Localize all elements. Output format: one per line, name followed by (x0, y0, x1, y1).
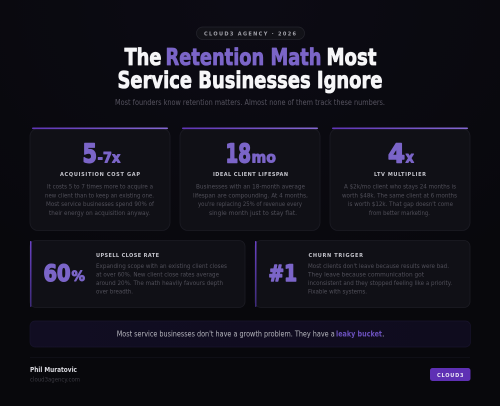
footer author: cloud3agency.com (30, 376, 80, 384)
callout (30, 321, 470, 347)
stat: 18mo: 18 (226, 140, 251, 170)
title: Most (326, 43, 376, 71)
header badge: CLOUD3 AGENCY · 2026 (204, 31, 297, 37)
body text: from better marketing. (369, 209, 430, 217)
label: ACQUISITION COST GAP (60, 172, 140, 178)
callout: Most service businesses don't have a growth problem. They have a (117, 330, 335, 338)
footer author (30, 365, 80, 384)
label: CHURN TRIGGER (308, 253, 363, 259)
panel: acquisition cost gap (30, 128, 170, 230)
body text: over breadth. (96, 288, 133, 296)
footer brand button (430, 368, 470, 381)
body text: Most clients don't leave because results were bad. (308, 262, 449, 270)
body text: worth $48k. The same client at 6 months (342, 191, 458, 199)
body text: They leave because communication got (307, 270, 424, 278)
callout: . (382, 330, 385, 338)
title: Retention Math (166, 43, 322, 71)
body text: their energy on acquisition anyway. (49, 209, 150, 217)
title: Service Businesses Ignore (118, 66, 382, 94)
body text: is worth $12k. That gap doesn't come (348, 200, 453, 208)
body text (96, 262, 228, 296)
label: LTV MULTIPLIER (374, 172, 426, 178)
body text (193, 182, 308, 217)
stat: 4x: 4 (388, 140, 405, 170)
stat suffix: -7x (98, 150, 120, 166)
title: The (124, 43, 162, 71)
panel: upsell close rate (30, 240, 245, 308)
body text: Expanding scope with an existing client closes (96, 262, 228, 270)
stat suffix: mo (252, 148, 276, 166)
footer brand button: CLOUD3 (437, 373, 464, 379)
body text (45, 182, 155, 217)
stat suffix: % (72, 269, 85, 285)
body text (307, 262, 452, 296)
header badge (196, 27, 304, 40)
body text: Businesses with an 18-month average (196, 182, 305, 190)
body text: A $2k/mo client who stays 24 months is (344, 182, 457, 190)
footer author: Phil Muratovic (30, 365, 77, 374)
body text: It costs 5 to 7 times more to acquire a (47, 182, 153, 190)
body text: inconsistent and they stopped feeling like a priority. (308, 279, 452, 287)
body text: new client than to keep an existing one. (45, 191, 154, 199)
panel: ideal client lifespan (180, 128, 320, 230)
label: UPSELL CLOSE RATE (96, 253, 160, 259)
body text: Most service businesses spend 90% of (46, 200, 155, 208)
callout: leaky bucket (336, 330, 382, 338)
stat: 60%: 60 (44, 261, 70, 287)
stat: 5-7x: 5 (82, 140, 97, 170)
title (118, 43, 382, 94)
body text: you're replacing 25% of revenue every (198, 200, 302, 208)
subtitle: Most founders know retention matters. Almost none of them track these numbers. (115, 98, 385, 107)
body text (342, 182, 458, 217)
panel: ltv multiplier (330, 128, 470, 230)
label: IDEAL CLIENT LIFESPAN (213, 172, 288, 178)
panel: churn trigger (255, 240, 470, 308)
body text: Fixable with systems. (308, 288, 367, 296)
body text: around 20%. The math heavily favours depth (96, 279, 223, 287)
body text: at over 60%. New client close rates average (96, 270, 219, 278)
body text: single month just to stay flat. (209, 209, 297, 217)
body text: lifespan are compounding. At 4 months, (193, 191, 308, 199)
stat suffix: x (406, 148, 414, 166)
stat: #1: #1 (268, 261, 297, 287)
